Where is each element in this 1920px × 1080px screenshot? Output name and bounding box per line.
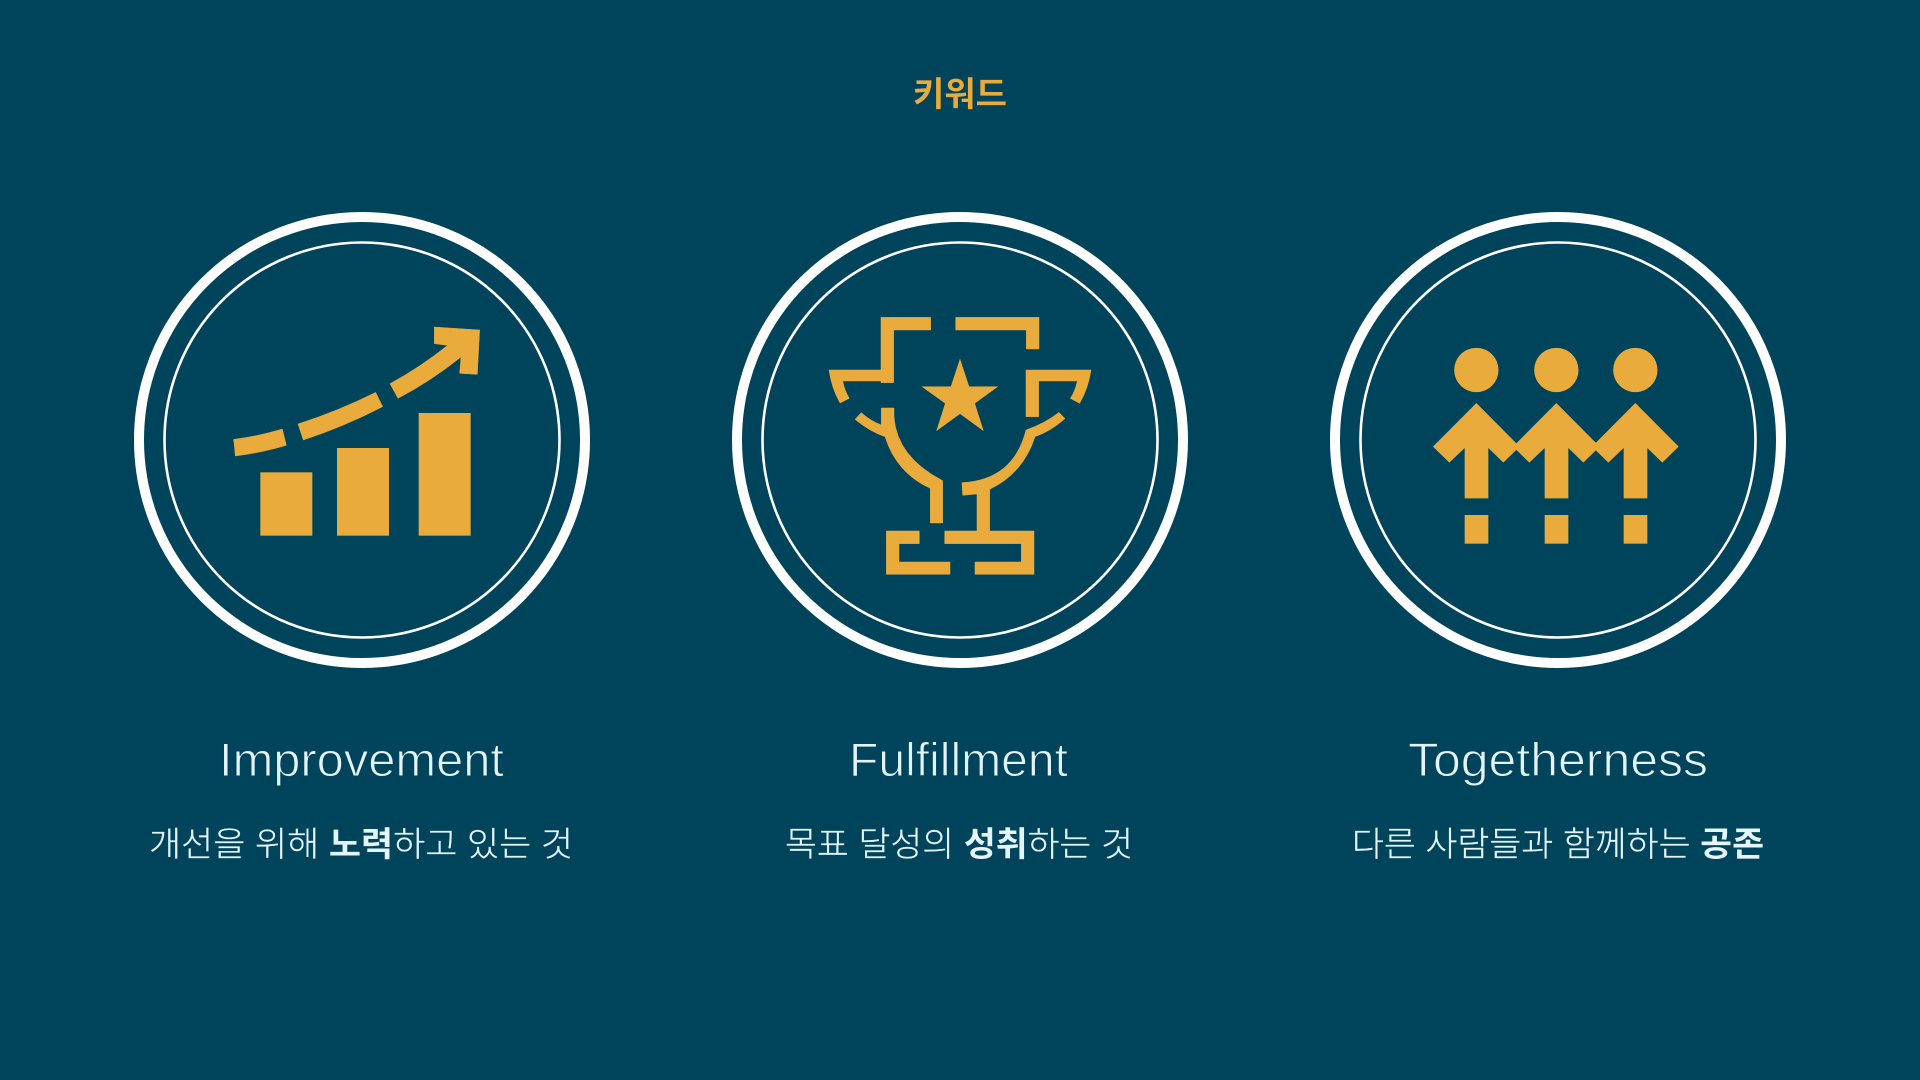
icon: trophy with star [829,317,1091,574]
outer ring [1335,217,1781,663]
title: 키워드 [913,76,1007,114]
inner ring [1360,242,1756,638]
heading: Togetherness: Togetherness [1408,733,1708,786]
text: improvement description: 개선을 위해 노력하고 있는 것 [149,826,573,864]
panel: improvement [139,217,585,864]
inner ring [164,242,560,638]
outer ring [139,217,585,663]
icon: growth bar chart with arrow [234,327,480,536]
outer ring [737,217,1183,663]
text: togetherness description: 다른 사람들과 함께하는 공존 [1352,826,1764,864]
icon: three people holding hands [1433,348,1679,544]
heading: Fulfillment: Fulfillment [849,733,1068,786]
inner ring [762,242,1158,638]
text: fulfillment description: 목표 달성의 성취하는 것 [785,826,1133,864]
panel: fulfillment [737,217,1183,864]
heading: Improvement: Improvement [219,733,504,786]
panel: togetherness [1335,217,1781,864]
